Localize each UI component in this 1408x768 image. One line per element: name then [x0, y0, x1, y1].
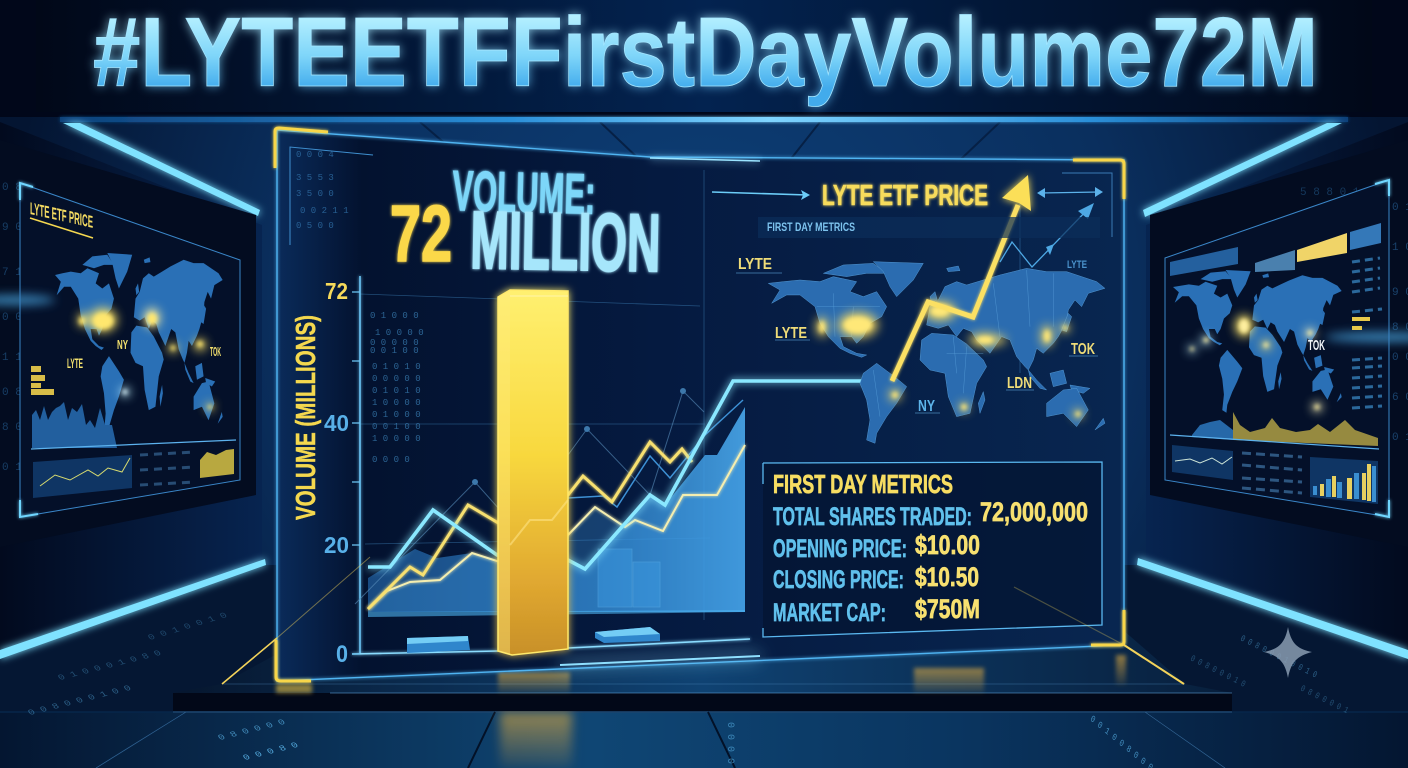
stage platform [173, 610, 1232, 711]
pedestal left [407, 636, 470, 653]
mini bar chart [1310, 457, 1378, 504]
72: 72 [390, 189, 452, 278]
blue histogram base [1192, 420, 1233, 440]
data rain middle: 1 0 0 0 0 [372, 398, 421, 408]
mini line chart [1172, 445, 1233, 480]
right wall screen [1150, 140, 1408, 547]
dim data line [355, 391, 704, 604]
column facet [498, 290, 568, 655]
left header arrow [712, 190, 810, 200]
screen corners [20, 183, 38, 517]
title underline [30, 218, 93, 238]
neon strip: top left [63, 123, 260, 216]
neon strip: bottom right [1137, 558, 1408, 659]
data rain middle: 0 0 0 0 0 [370, 338, 419, 348]
top tabs [1170, 223, 1381, 276]
floor binary marks: 0 0 0 0 [724, 722, 735, 764]
total shares row: 72,000,000 [980, 497, 1088, 527]
volume chart [290, 276, 892, 668]
binary digits column [2, 182, 22, 474]
chart floor [368, 610, 745, 617]
sparkle watermark [1264, 627, 1312, 678]
double arrow [1037, 187, 1103, 198]
axis labels: 72 [325, 278, 348, 304]
data rain middle: 0 0 1 0 0 [372, 422, 421, 432]
map hot spot cores [819, 306, 1080, 416]
binary digits column: 1 1 [2, 352, 22, 364]
glass chart panel [277, 130, 1124, 681]
cyan line to price arrow [368, 381, 892, 569]
total shares row: TOTAL SHARES TRADED: [773, 503, 972, 531]
glowing top edge [650, 158, 760, 161]
blue trend arrow [1000, 203, 1094, 267]
perspective line bottom left faint [277, 557, 370, 638]
data rain middle: 0 1 0 0 0 [370, 311, 419, 321]
binary digits column: 5 8 8 0 1 1 8 [1300, 187, 1386, 199]
first day metrics box [763, 462, 1102, 637]
highlighted 72M column [498, 290, 568, 655]
data rain middle: 1 0 0 0 0 [375, 328, 424, 338]
floor binary marks: 0 0 8 0 0 0 1 0 0 1 0 [1238, 634, 1319, 681]
market cap row: MARKET CAP: [773, 599, 886, 627]
binary digits column: 0 1 [2, 462, 22, 474]
price heading: LYTE ETF PRICE [822, 180, 988, 212]
data rain top left: 0 0 0 4 [296, 150, 334, 160]
corner frame [1062, 173, 1112, 237]
mini data table [140, 452, 195, 485]
glowing bottom edge [560, 656, 760, 665]
floor binary marks: 0 8 0 0 0 0 1 [1298, 684, 1350, 716]
map label: TOK [1308, 337, 1325, 354]
map hot spots [78, 308, 214, 411]
data rain middle: 0 0 0 0 [372, 455, 410, 465]
base line [1170, 435, 1379, 449]
lower area series [368, 445, 745, 612]
map hot spots [816, 301, 1083, 419]
data rain middle: 0 1 0 0 0 [372, 410, 421, 420]
y axis [359, 276, 361, 654]
yellow bars [31, 366, 54, 395]
axis labels: 20 [324, 532, 349, 558]
binary digits column: 0 0 [2, 312, 22, 324]
price section [712, 173, 1112, 443]
baseline [352, 639, 750, 654]
floor [0, 565, 1408, 768]
secondary blue line [568, 400, 743, 507]
mini line chart [33, 455, 132, 498]
left wall screen: LYTE ETF PRICE [30, 198, 93, 232]
area series [368, 407, 745, 612]
map labels: NY [918, 398, 935, 415]
binary digits column: 9 0 [2, 222, 22, 234]
data rain middle: 0 1 0 1 0 [372, 362, 421, 372]
heading: FIRST DAY METRICS [773, 469, 953, 499]
data rain top left: 0 5 0 0 [296, 221, 334, 231]
world map [768, 262, 1105, 443]
data rain middle: 0 0 0 0 0 [372, 374, 421, 384]
opening price row: OPENING PRICE: [773, 535, 907, 563]
map hot spot cores [1190, 319, 1320, 410]
map labels: TOK [1071, 341, 1095, 358]
volume label: VOLUME: [452, 159, 596, 227]
map labels [67, 337, 221, 371]
map labels: LYTE [1067, 259, 1087, 271]
floor binary marks: 0 0 8 0 0 0 1 0 [1188, 654, 1247, 690]
perspective line bottom left [222, 638, 277, 684]
neon strip: bottom left [0, 559, 266, 659]
data rain middle: 0 1 0 1 0 [372, 386, 421, 396]
column bars [598, 549, 660, 607]
yellow mini area [200, 449, 234, 478]
map hot spots [1188, 315, 1322, 412]
side glow beam [1325, 332, 1408, 342]
neon strip: top right [1143, 123, 1342, 217]
side glow beam [0, 295, 55, 305]
binary digits column: 0 8 [2, 182, 22, 194]
header band [0, 0, 1408, 122]
world map [55, 253, 223, 437]
sub-heading strip: FIRST DAY METRICS [767, 220, 855, 234]
world map [1173, 270, 1342, 413]
pedestal right [595, 627, 660, 643]
pale yellow line [368, 445, 745, 609]
floor binary marks: 0 0 1 0 0 1 0 [146, 611, 230, 642]
stage yellow reflections [498, 672, 570, 693]
histogram [32, 402, 117, 448]
screen frame [20, 183, 240, 517]
data rain top left: 3 5 5 3 [296, 173, 334, 183]
map hot spot cores [79, 313, 212, 409]
inner corner frame [290, 147, 373, 245]
price line rising [892, 205, 1018, 381]
label underlines [736, 273, 1098, 413]
floor binary marks: 0 8 0 0 0 0 [216, 718, 288, 742]
data rain top left: 3 5 0 0 [296, 189, 334, 199]
data rain top left [296, 150, 349, 231]
data rain middle: 1 0 0 0 0 [372, 434, 421, 444]
map labels: LDN [1007, 375, 1032, 392]
floor binary marks: 0 1 0 0 0 1 0 8 0 [56, 649, 164, 682]
bar floor reflection [500, 712, 572, 768]
axis labels: 40 [324, 410, 349, 436]
axis labels [324, 278, 349, 668]
bright yellow line [368, 442, 692, 609]
map labels: LYTE [775, 325, 807, 342]
data rain top left: 0 0 2 1 1 [300, 206, 349, 216]
price arrow head [1002, 175, 1031, 211]
binary digits column: 8 0 [2, 422, 22, 434]
dim line points [472, 388, 686, 485]
map labels [738, 256, 1095, 415]
perspective line bottom right faint [1014, 587, 1124, 645]
floor binary marks [26, 611, 1350, 768]
opening price row: $10.00 [915, 530, 980, 560]
map labels: LYTE [67, 355, 83, 371]
binary digits column: 7 1 [2, 267, 22, 279]
yellow corner brackets [275, 128, 1124, 681]
data rain middle [370, 311, 424, 465]
binary digits column: 0 8 [2, 387, 22, 399]
map labels: LYTE [738, 256, 772, 273]
data rain middle: 0 0 1 0 0 [370, 346, 419, 356]
mini data table [1242, 453, 1302, 493]
screen frame [1165, 180, 1389, 517]
market cap row: $750M [915, 594, 980, 624]
axis ticks [352, 292, 360, 654]
yellow and blue histogram [1233, 412, 1378, 446]
left wall screen: TOK [210, 344, 221, 359]
screen corners [1375, 180, 1389, 517]
axis labels: 0 [336, 641, 348, 668]
axis title: VOLUME (MILLIONS) [290, 315, 321, 520]
yellow row chips [1352, 317, 1370, 330]
floor binary marks: 0 0 0 8 0 [241, 741, 301, 762]
closing price row: CLOSING PRICE: [773, 566, 904, 594]
right data rows [1352, 258, 1382, 408]
million: MILLION [470, 195, 661, 289]
grid lines [360, 170, 1020, 620]
floor binary marks: 0 0 8 0 0 0 1 0 0 [26, 684, 134, 717]
panel outline [277, 130, 1124, 681]
map labels: NY [117, 337, 128, 352]
left wall screen [0, 140, 256, 547]
closing price row: $10.50 [915, 562, 979, 592]
sub-heading strip [758, 217, 1100, 238]
binary digits column [1300, 187, 1408, 444]
headline: volume [390, 159, 661, 289]
perspective line bottom right [1124, 645, 1184, 684]
base line [31, 440, 236, 449]
